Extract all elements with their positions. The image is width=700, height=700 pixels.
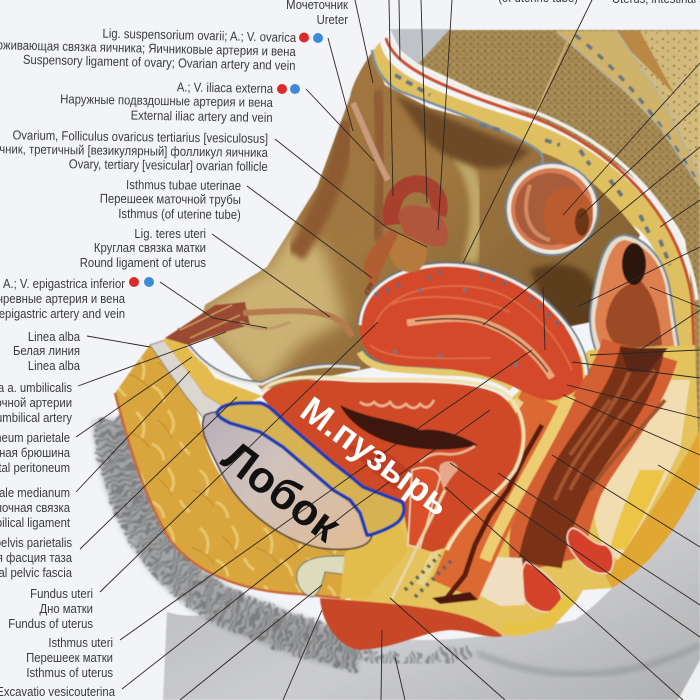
outer gluteal fat lobe — [605, 430, 700, 588]
blue outline of bladder — [217, 403, 404, 535]
label: round ligament — [80, 226, 206, 270]
pale wall stripes — [485, 395, 570, 560]
label: isthmus of uterus: Перешеек матки — [26, 650, 113, 665]
rectal folds — [555, 370, 665, 500]
pale wall arc — [455, 150, 477, 262]
bottom corner highlight — [678, 660, 700, 700]
urethral opening — [439, 461, 458, 490]
label: isthmus of tube: Isthmus (of uterine tube) — [118, 206, 241, 222]
uterine cavity — [407, 318, 552, 378]
peritoneal and yellow band along sacrum — [372, 36, 697, 362]
label: ureter — [286, 0, 349, 27]
rectus muscle — [165, 302, 250, 345]
upper rectum loop — [506, 163, 598, 255]
dark wall streak — [295, 120, 345, 255]
lower right shadow — [529, 262, 594, 326]
round ligament vessels — [243, 311, 352, 336]
perineal body cream — [470, 556, 525, 606]
label: ureter: Ureter — [317, 12, 348, 27]
lower red sphincter — [567, 528, 613, 573]
label: round ligament: Lig. teres uteri — [134, 226, 206, 241]
fallopian tube and ovary — [353, 103, 448, 293]
vertebra stripes band — [557, 31, 700, 187]
vaginal lumen — [445, 425, 542, 600]
pad right of symphysis — [340, 522, 408, 600]
lower tan wall zone — [200, 225, 345, 390]
label: suspensory ligament: Lig. suspensorium ovarii; A.; V. ovarica — [102, 26, 296, 45]
urethra wall — [408, 468, 440, 548]
bladder — [262, 377, 524, 598]
label: linea alba: Белая линия — [13, 343, 80, 358]
top grey membrane — [390, 29, 450, 64]
abdominal wall layers — [150, 302, 360, 420]
skin fold — [477, 645, 700, 674]
abdominal wall fat with pubic pad — [115, 345, 408, 600]
clitoris bulb — [297, 556, 360, 597]
label: round ligament: Круглая связка матки — [94, 240, 206, 255]
abdominal cavity brown wall — [202, 52, 641, 390]
label: isthmus of uterus: Isthmus of uterus — [26, 665, 113, 680]
label: suspensory ligament — [0, 23, 296, 73]
pubic hair strands — [112, 420, 360, 652]
label: linea alba: Linea alba — [28, 358, 80, 373]
rectum wall — [548, 350, 640, 565]
fibres — [370, 286, 572, 370]
label: parietal pelvic fascia — [0, 535, 72, 580]
anal canal outer sphincter — [521, 562, 562, 612]
vesicouterine peritoneum — [360, 348, 512, 388]
fat beside anal canal — [503, 592, 573, 636]
bladder lumen — [340, 405, 478, 450]
disc line — [535, 32, 572, 118]
uterus — [358, 262, 589, 400]
dots: artery and vein suspensory — [299, 32, 323, 43]
label: isthmus of tube: Isthmus tubae uterinae — [126, 177, 241, 193]
skin of thigh and buttock — [163, 460, 700, 700]
retropubic fat band — [217, 403, 405, 535]
rectal lumen — [540, 350, 642, 565]
label: external iliac: External iliac artery and vein — [131, 108, 273, 125]
speckled top right — [617, 31, 700, 177]
label: linea alba: Linea alba — [28, 329, 80, 344]
label: linea alba — [13, 329, 80, 373]
label: ovary: Ovarium, Folliculus ovaricus tertiarius [vesiculosus] — [12, 128, 268, 146]
label: inferior epigastric — [0, 276, 125, 321]
vessel dots — [375, 268, 565, 330]
skin edge — [115, 393, 340, 598]
vaginal wall — [455, 400, 545, 590]
label: isthmus of tube: Перешеек маточной трубы — [100, 191, 241, 207]
label: isthmus of uterus: Isthmus uteri — [48, 635, 113, 650]
label: isthmus of uterus — [26, 635, 113, 680]
orange streak — [610, 31, 675, 95]
pubic symphysis bone — [203, 412, 372, 549]
label: parietal peritoneum — [0, 430, 70, 475]
label: external iliac: A.; V. iliaca externa — [177, 80, 273, 96]
bladder wrinkles — [360, 400, 475, 462]
label: isthmus of tube — [100, 177, 241, 222]
pubic hair mass — [112, 420, 360, 652]
overlay label: Лобок: Лобок — [213, 432, 350, 552]
label: round ligament: Round ligament of uterus — [80, 255, 206, 270]
label: external iliac: Наружные подвздошные артерия и вена — [60, 92, 273, 110]
label: ovary — [0, 127, 268, 174]
label: fundus of uterus: Дно матки — [39, 601, 93, 616]
pale ischiorectal wedge — [594, 380, 690, 560]
label: inferior epigastric: A.; V. epigastrica inferior — [3, 276, 125, 291]
dots: artery and vein iliac — [277, 84, 300, 94]
label: fundus of uterus — [8, 586, 93, 631]
vaginal base dark — [432, 592, 478, 604]
clitoral/urethral fat dots — [405, 555, 452, 597]
label: median umbilical ligament — [0, 485, 71, 530]
perineal hair — [350, 648, 470, 661]
label: ovary: Ovary, tertiary [vesicular] ovarian follicle — [69, 156, 268, 174]
lower pelvic fat and perineal base — [350, 345, 700, 635]
lower colon loop — [590, 235, 680, 360]
label: fundus of uterus: Fundus of uterus — [8, 616, 93, 631]
second brown streak — [375, 90, 382, 240]
sacrum block — [390, 29, 700, 445]
dark brown top shading — [395, 95, 530, 169]
label: fundus of uterus: Fundus uteri — [30, 586, 93, 601]
overlay label: М.пузырь: М.пузырь — [293, 388, 458, 524]
label: suspensory ligament: Suspensory ligament of ovary; Ovarian artery and vein — [23, 52, 296, 73]
label: external iliac — [60, 78, 273, 125]
dots: artery and vein epigastric — [129, 277, 154, 287]
label: umbilical artery — [0, 380, 73, 425]
dark rectal upper — [620, 348, 668, 372]
labia — [320, 598, 503, 650]
